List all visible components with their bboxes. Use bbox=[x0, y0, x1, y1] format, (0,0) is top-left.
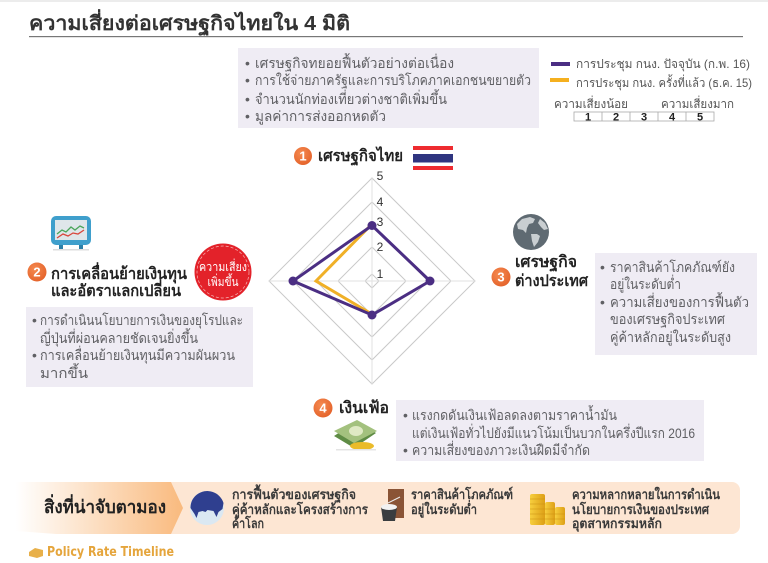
legend: ความเสี่ยงมาก bbox=[661, 95, 734, 111]
panel: things to watch bbox=[16, 482, 740, 534]
panel: foreign economy notes: ความเสี่ยงของการฟื้นตัว bbox=[610, 292, 749, 310]
panel: capital flow notes bbox=[26, 307, 253, 387]
badge: risk increased bbox=[194, 244, 252, 300]
legend: การประชุม กนง. ครั้งที่แล้ว (ธ.ค. 15) bbox=[576, 74, 752, 91]
heading 3: foreign economies: ต่างประเทศ bbox=[515, 273, 589, 290]
legend: 3 bbox=[641, 112, 647, 124]
legend: ความเสี่ยงน้อย bbox=[554, 95, 628, 111]
watch item: policy diversity: อุตสาหกรรมหลัก bbox=[572, 516, 662, 532]
radar chart: 4 bbox=[377, 195, 384, 209]
icon: grey globe bbox=[513, 214, 549, 250]
heading arrow: สิ่งที่น่าจับตามอง bbox=[44, 494, 166, 517]
panel: capital flow notes: มากขึ้น bbox=[40, 363, 88, 381]
heading 1: Thai economy bbox=[294, 146, 403, 166]
panel: capital flow notes: • bbox=[32, 347, 37, 363]
radar chart: 2 bbox=[377, 240, 384, 254]
icon: blue globe bbox=[190, 491, 224, 525]
panel: Thai economy notes: • bbox=[245, 91, 250, 107]
legend: 5 bbox=[697, 112, 703, 124]
panel: Thai economy notes: การใช้จ่ายภาครัฐและการบริโภคภาคเอกชนขยายตัว bbox=[255, 72, 531, 89]
watch item: commodities: อยู่ในระดับต่ำ bbox=[411, 499, 477, 518]
icon: Thai flag bbox=[413, 146, 453, 170]
panel: inflation notes: แต่เงินเฟ้อทั่วไปยังมีแนวโน้มเป็นบวกในครึ่งปีแรก 2016 bbox=[412, 424, 695, 441]
badge: risk increased: ความเสี่ยง bbox=[199, 258, 247, 274]
heading 4: inflation: 4 bbox=[319, 400, 327, 416]
panel: foreign economy notes bbox=[595, 253, 757, 355]
panel: Thai economy notes: • bbox=[245, 108, 250, 124]
panel: Thai economy notes: • bbox=[245, 55, 250, 71]
panel: Thai economy notes bbox=[238, 48, 539, 128]
watch item: policy diversity: ความหลากหลายในการดำเนิน bbox=[572, 486, 721, 502]
legend: การประชุม กนง. ปัจจุบัน (ก.พ. 16) bbox=[576, 57, 750, 72]
badge: risk increased: เพิ่มขึ้น bbox=[208, 273, 238, 289]
panel: foreign economy notes: • bbox=[600, 294, 605, 310]
heading 1: Thai economy: เศรษฐกิจไทย bbox=[318, 146, 403, 166]
radar chart: 3 bbox=[377, 215, 384, 229]
icon: commodity bbox=[381, 489, 404, 521]
panel: foreign economy notes: ของเศรษฐกิจประเทศ bbox=[610, 311, 725, 328]
panel: foreign economy notes: ราคาสินค้าโภคภัณฑ์ยัง bbox=[610, 259, 735, 275]
icon: gold coins bbox=[530, 494, 565, 525]
heading 4: inflation: เงินเฟ้อ bbox=[339, 399, 389, 417]
watch item: trade: คู่ค้าหลักและโครงสร้างการ bbox=[232, 500, 369, 518]
panel: foreign economy notes: อยู่ในระดับต่ำ bbox=[610, 275, 681, 293]
panel: Thai economy notes: เศรษฐกิจทยอยฟื้นตัวอย่างต่อเนื่อง bbox=[255, 53, 454, 72]
policy rate timeline link: Policy Rate Timeline bbox=[47, 545, 174, 560]
panel: capital flow notes: • bbox=[32, 312, 37, 328]
heading 3: foreign economies: เศรษฐกิจ bbox=[515, 253, 577, 272]
heading 1: Thai economy: 1 bbox=[299, 148, 307, 164]
heading 2: capital flows: และอัตราแลกเปลี่ยน bbox=[51, 279, 181, 300]
panel: inflation notes: • bbox=[403, 442, 408, 458]
watch item: trade: ค้าโลก bbox=[232, 514, 264, 531]
panel: inflation notes: แรงกดดันเงินเฟ้อลดลงตามราคาน้ำมัน bbox=[412, 405, 617, 423]
panel: inflation notes: ความเสี่ยงของภาวะเงินฝืดมีจำกัด bbox=[412, 441, 590, 458]
heading 2: capital flows: 2 bbox=[33, 264, 41, 280]
panel: capital flow notes: การเคลื่อนย้ายเงินทุนมีความผันผวน bbox=[40, 346, 235, 364]
heading 4: inflation bbox=[314, 398, 389, 418]
legend: 1 bbox=[585, 112, 591, 124]
panel: inflation notes bbox=[396, 400, 704, 461]
panel: inflation notes: • bbox=[403, 407, 408, 423]
legend: 2 bbox=[613, 112, 619, 124]
legend bbox=[550, 57, 752, 124]
icon: money bbox=[334, 420, 377, 450]
heading 2: capital flows: การเคลื่อนย้ายเงินทุน bbox=[51, 262, 187, 284]
panel: capital flow notes: การดำเนินนโยบายการเงินของยุโรปและ bbox=[40, 312, 243, 329]
panel: Thai economy notes: มูลค่าการส่งออกหดตัว bbox=[255, 108, 386, 125]
title: ความเสี่ยงต่อเศรษฐกิจไทยใน 4 มิติ bbox=[29, 8, 350, 37]
radar chart: 5 bbox=[377, 169, 384, 183]
watch item: trade: การฟื้นตัวของเศรษฐกิจ bbox=[232, 484, 356, 504]
panel: capital flow notes: ญี่ปุ่นที่ผ่อนคลายชัดเจนยิ่งขึ้น bbox=[40, 328, 198, 347]
heading 3: foreign economies bbox=[492, 253, 589, 290]
heading 3: foreign economies: 3 bbox=[497, 270, 505, 284]
watch item: commodities: ราคาสินค้าโภคภัณฑ์ bbox=[411, 485, 513, 502]
watch item: policy diversity bbox=[572, 486, 721, 532]
watch item: policy diversity: นโยบายการเงินของประเทศ bbox=[572, 500, 709, 517]
radar chart bbox=[269, 169, 475, 384]
panel: Thai economy notes: • bbox=[245, 72, 250, 88]
panel: foreign economy notes: • bbox=[600, 259, 605, 275]
watch item: trade bbox=[232, 484, 369, 531]
heading 2: capital flows bbox=[28, 262, 187, 300]
icon: monitor chart bbox=[51, 216, 91, 250]
panel: foreign economy notes: คู่ค้าหลักอยู่ในระดับสูง bbox=[610, 329, 731, 346]
legend: 4 bbox=[669, 112, 676, 124]
heading arrow bbox=[16, 482, 183, 534]
radar chart: 1 bbox=[377, 267, 384, 281]
panel: Thai economy notes: จำนวนนักท่องเที่ยวต่างชาติเพิ่มขึ้น bbox=[255, 89, 447, 107]
watch item: commodities bbox=[411, 485, 513, 518]
